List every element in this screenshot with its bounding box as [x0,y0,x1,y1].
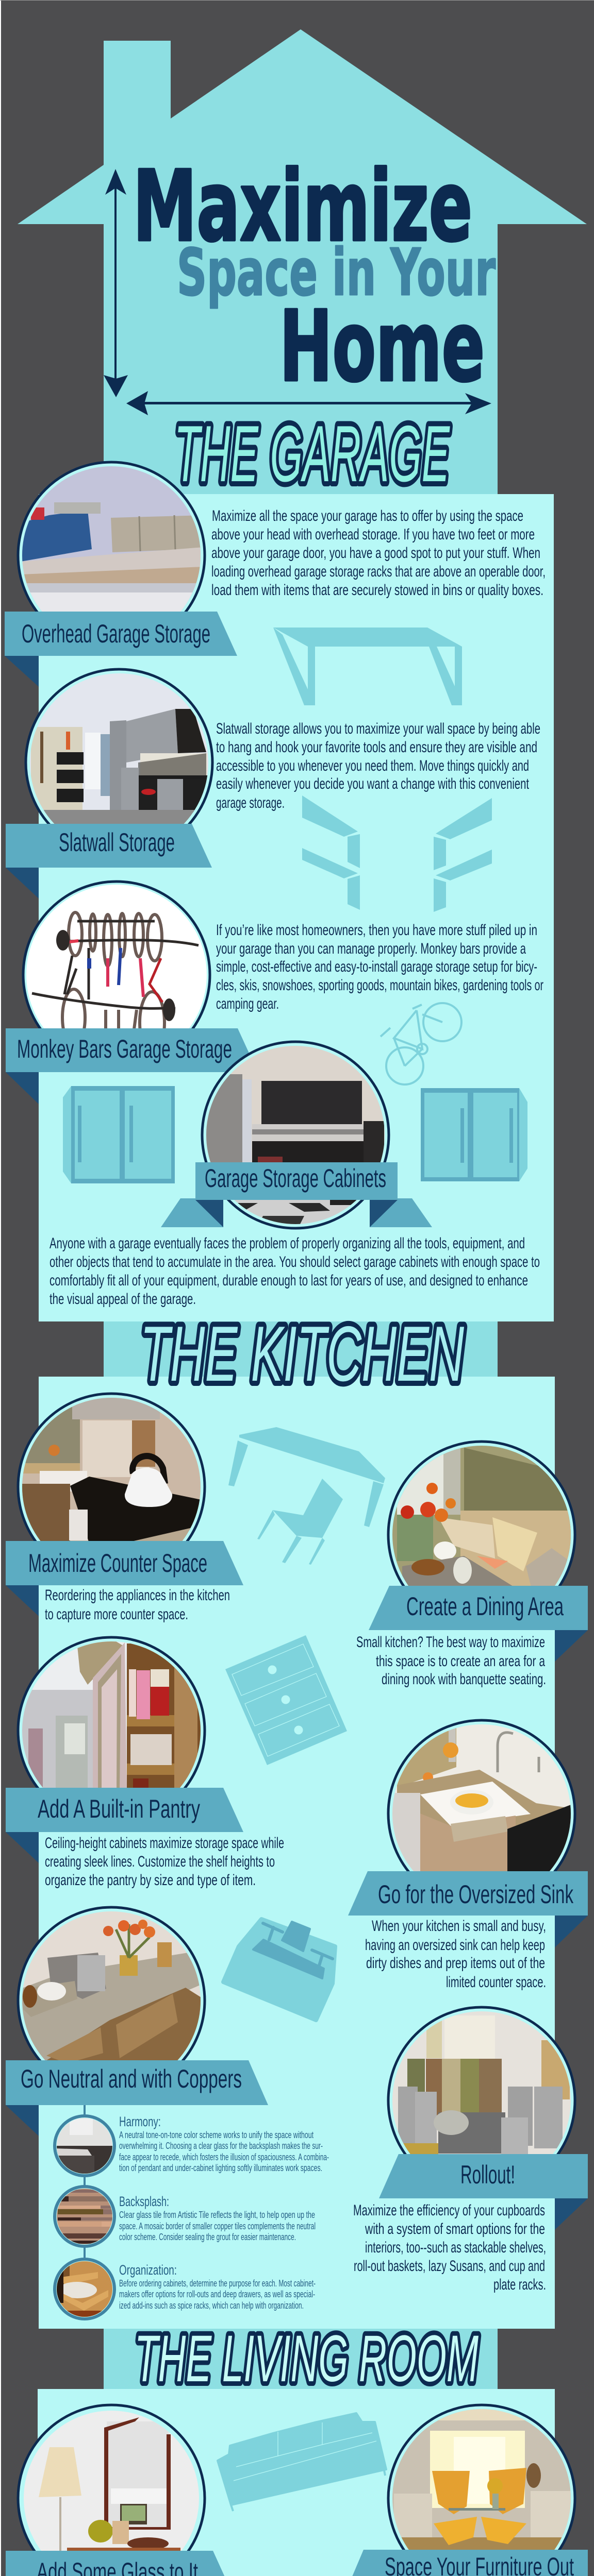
text: harmony: A neutral tone-on-tone color scheme works to unify the space without [119,2130,314,2140]
house shape [18,29,587,494]
photo: space furniture [387,2404,576,2550]
panel: the kitchen [6,1310,588,2329]
photo: neutral and coppers [16,1906,206,2060]
connector line [84,2105,86,2320]
photo: harmony [54,2116,116,2179]
photo: garage cabinets [201,1041,392,1231]
text: harmony [119,2114,329,2173]
text: backsplash [119,2194,316,2242]
panel background [39,494,554,1321]
photo: slatwall storage [25,668,213,824]
arrow: vertical dimension [104,169,128,397]
living room header strip [104,2329,498,2389]
text: rollout [353,2202,546,2293]
banner: monkey bars garage storage [6,1028,258,1104]
banner: overhead garage storage: Overhead Garage Storage [22,619,210,648]
photo: rollout [387,2006,576,2154]
text: organization: Organization: [119,2262,177,2278]
banner: add some glass to it [6,2551,233,2576]
photo: overhead storage [16,461,206,612]
text: garage cabinets: the visual appeal of the garage. [50,1291,196,1308]
arrow: horizontal dimension [126,391,491,415]
text: pantry [45,1835,284,1889]
banner: create a dining area [369,1586,588,1662]
banner: rollout: Rollout! [460,2160,515,2189]
text: monkey bars: camping gear. [216,995,279,1012]
banner: go neutral and with coppers [6,2060,268,2136]
text: dining area [356,1634,546,1688]
photo: built-in pantry [16,1636,206,1788]
text: organization: makers offer options for roll-outs and deep drawers, as well as special- [119,2289,315,2299]
icon: slatwall shelves [302,795,492,912]
text: harmony: tion of pendant and under-cabinet lighting softly illuminates work spaces. [119,2163,322,2173]
photo: oversized sink [387,1719,576,1871]
text: organization: ized add-ins such as spice racks, which can help with organization. [119,2300,304,2311]
banner: go neutral and with coppers: Go Neutral and with Coppers [21,2064,242,2093]
text: pantry: organize the pantry by size and type of item. [45,1872,256,1889]
text: backsplash: color scheme. Consider sealing the grout for easier maintenance. [119,2232,296,2242]
text: slatwall storage: garage storage. [216,794,285,811]
text: counter space: to capture more counter space. [45,1606,188,1623]
banner: go for the oversized sink [348,1871,588,1947]
icon: wall shelf [273,628,462,705]
panel background [39,1377,555,2329]
photo: organization [54,2259,116,2321]
text: counter space [45,1587,230,1623]
icon: table and chair [228,1427,385,1565]
text: organization [119,2262,316,2311]
kitchen header strip [104,1321,498,1377]
text: pantry: Ceiling-height cabinets maximize storage space while [45,1835,284,1852]
icon: sofa [218,2413,386,2511]
banner: slatwall storage: Slatwall Storage [59,828,175,857]
text: rollout: plate racks. [493,2276,546,2293]
title: Home [279,290,485,403]
text: backsplash: space. A mosaic border of smaller copper tiles complements the neutral [119,2221,316,2231]
banner: slatwall storage [6,824,212,899]
title [133,150,496,403]
banner: add a built-in pantry: Add A Built-in Pantry [38,1794,200,1823]
text: oversized sink [365,1918,546,1991]
panel: the garage [5,409,554,1321]
icon: bicycle [381,1003,461,1084]
icon: right cabinet [421,1088,527,1181]
photo: monkey bars bikes [22,880,211,1028]
text: pantry: creating sleek lines. Customize the shelf heights to [45,1853,275,1870]
photo: counter space [16,1392,206,1541]
banner: garage storage cabinets [161,1162,432,1227]
banner: rollout [379,2154,588,2230]
banner: overhead garage storage [5,612,237,687]
icon: drawers [225,1635,347,1765]
text: harmony: Harmony: [119,2114,161,2129]
panel: the living room [4,2322,588,2576]
panel background [38,2389,555,2576]
banner: add a built-in pantry [6,1788,243,1863]
icon: sink [223,1919,335,2020]
photo: backsplash [54,2187,116,2246]
banner: garage storage cabinets: Garage Storage Cabinets [205,1164,386,1193]
photo: glass [16,2404,206,2551]
text: counter space: Reordering the appliances in the kitchen [45,1587,230,1604]
text: garage cabinets [50,1235,540,1308]
banner: maximize counter space: Maximize Counter Space [28,1549,207,1578]
banner: monkey bars garage storage: Monkey Bars Garage Storage [17,1035,232,1063]
text: monkey bars [216,922,543,1012]
text: overhead storage [211,507,546,599]
text: backsplash: Backsplash: [119,2194,169,2209]
text: slatwall storage [216,720,540,811]
text: oversized sink: limited counter space. [446,1974,546,1991]
banner: maximize counter space [6,1541,243,1616]
house header [18,29,587,494]
text: harmony: overwhelming it. Choosing a clear glass for the backsplash makes the sur- [119,2141,323,2151]
text: backsplash: Clear glass tile from Artistic Tile reflects the light, to help open up the [119,2210,315,2220]
photo: dining area [387,1440,576,1586]
icon: left cabinet [63,1086,175,1183]
text: harmony: face appear to recede, which fosters the illusion of spaciousness. A combina- [119,2152,329,2162]
text: organization: Before ordering cabinets, determine the purpose for each. Most cabinet- [119,2278,316,2289]
